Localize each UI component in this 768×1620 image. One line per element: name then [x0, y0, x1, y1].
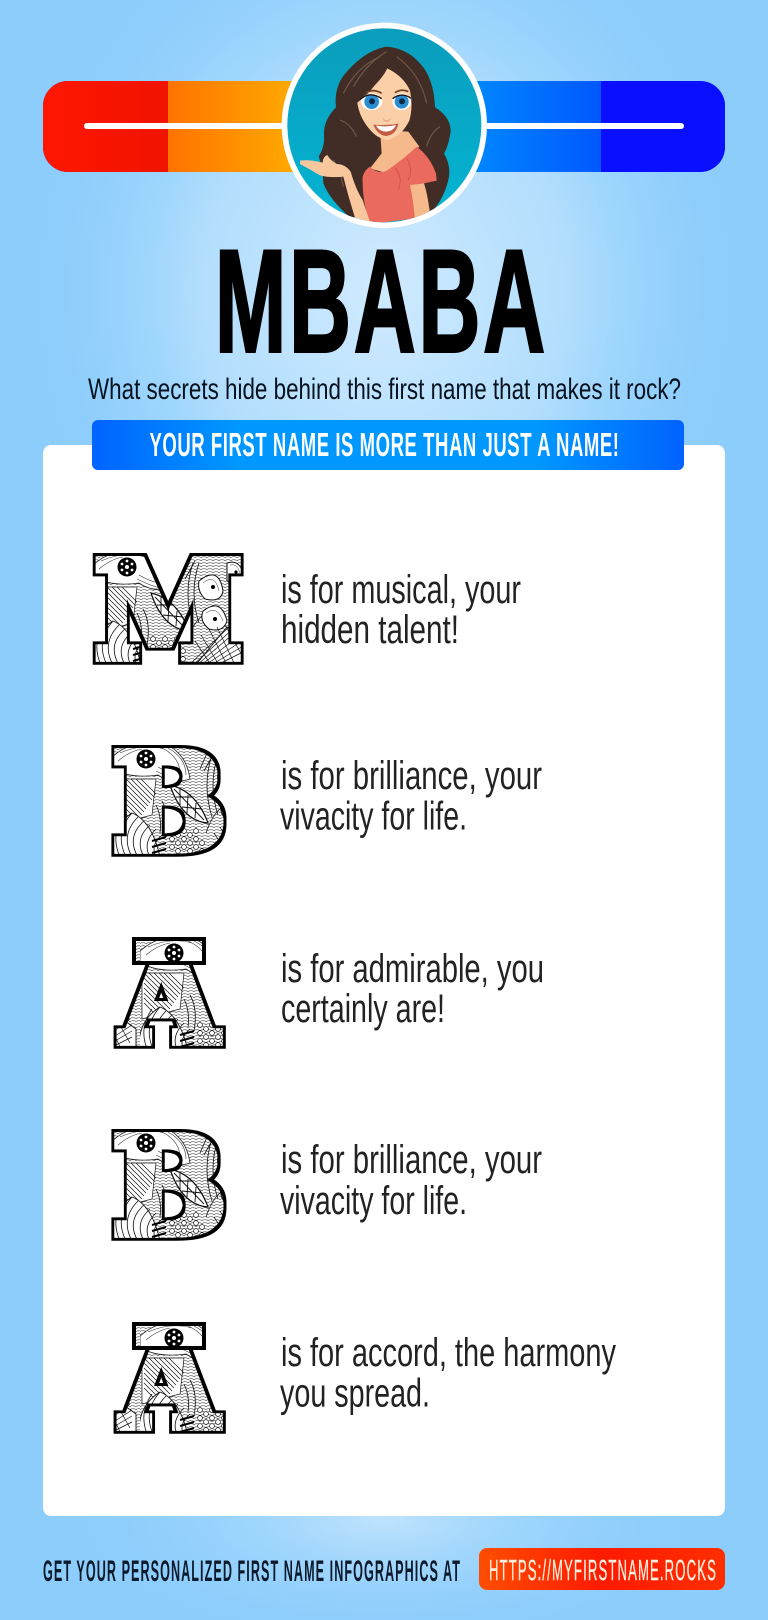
right arm [410, 183, 430, 220]
header gradient bar [43, 81, 725, 172]
row: letter B [113, 726, 542, 881]
eyes [360, 93, 411, 110]
text: M meaning: is for musical, your [281, 568, 521, 612]
text: B meaning: is for brilliance, your [281, 754, 542, 798]
white content panel [43, 445, 725, 1516]
text: B meaning second [280, 1138, 542, 1223]
row: letter A [120, 918, 544, 1073]
row: letter A second [120, 1303, 616, 1458]
text: M meaning [281, 568, 521, 652]
mouth [373, 124, 398, 136]
face [357, 68, 412, 140]
text: A meaning second: you spread. [280, 1372, 430, 1416]
banner [92, 420, 684, 470]
nose [382, 117, 392, 122]
footer url button [479, 1548, 725, 1590]
title: name: MBABA [215, 220, 548, 382]
text: A meaning: is for admirable, you [281, 947, 544, 991]
text: B meaning: vivacity for life. [280, 794, 467, 838]
text: B meaning [280, 754, 542, 838]
row: letter M [95, 534, 521, 689]
shirt [363, 147, 437, 224]
text: A meaning second [280, 1331, 616, 1416]
eyebrows [366, 90, 408, 93]
letter M illustration: M [95, 534, 242, 689]
text: A meaning second: is for accord, the harmony [281, 1331, 616, 1375]
avatar portrait [282, 23, 487, 228]
left arm and hand [300, 155, 370, 222]
text: M meaning: hidden talent! [281, 608, 459, 652]
letter A illustration second: A [120, 1303, 218, 1458]
text: A meaning: certainly are! [281, 987, 445, 1031]
text: A meaning [281, 947, 544, 1031]
text: B meaning second: vivacity for life. [280, 1179, 467, 1223]
neck and chest [370, 130, 419, 173]
letter A illustration: A [120, 918, 218, 1073]
letter B illustration: B [113, 726, 226, 881]
row: letter B second [113, 1110, 542, 1265]
letter B illustration second: B [113, 1110, 226, 1265]
hair [319, 47, 451, 217]
text: B meaning second: is for brilliance, your [281, 1138, 542, 1182]
